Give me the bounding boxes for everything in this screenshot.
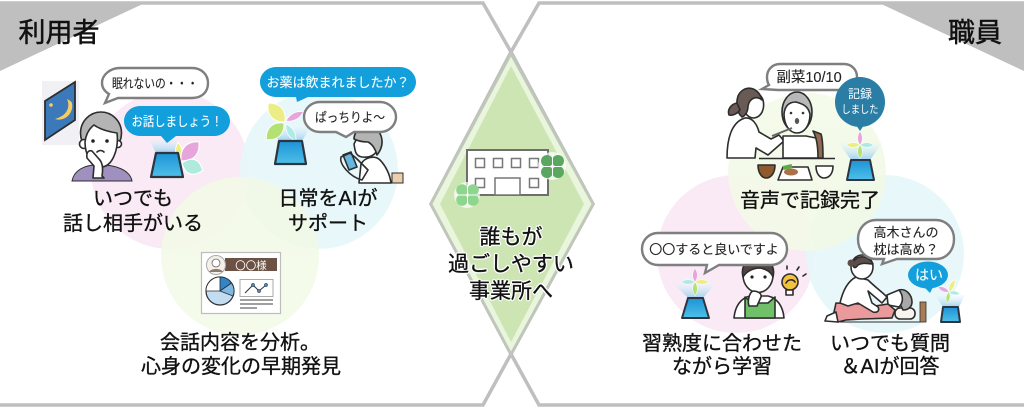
- tablet with beam and flower: talk: [149, 137, 205, 178]
- speech circle: recorded: しました: [842, 103, 878, 116]
- speech bubble: sleepless: [102, 68, 208, 103]
- heading: users: 利用者: [18, 18, 100, 48]
- panel frame: staff: [511, 2, 1024, 405]
- caption: always someone to talk to: 話し相手がいる: [63, 212, 203, 235]
- caption: AI supports daily life: サポート: [288, 212, 368, 235]
- center message: [448, 224, 574, 303]
- tablet with beam and flower: answer: [935, 279, 965, 322]
- caption: always someone to talk to: [63, 188, 203, 235]
- icon: building with clovers: [454, 150, 566, 208]
- speech bubble: feeling good: [304, 102, 396, 137]
- speech bubble: advice: [642, 233, 787, 273]
- center message: 誰もが: [480, 226, 542, 249]
- background circles: staff: [657, 93, 964, 333]
- center message: 過ごしやすい: [448, 253, 574, 276]
- illustration: man drinking: [341, 127, 403, 183]
- illustration: nurse feeding resident: [727, 88, 835, 180]
- center diamond: [431, 54, 593, 354]
- background circles: users: [91, 91, 398, 335]
- caption: learning at own level: [642, 332, 802, 378]
- icon: analysis report: 〇〇様: [235, 259, 267, 272]
- speech bubble: feeling good: ぱっちりよ〜: [315, 110, 385, 125]
- illustration: nurse caring for lying resident: [825, 255, 926, 322]
- speech bubble: medicine: [260, 67, 416, 102]
- speech bubble: side dish record: 副菜10/10: [776, 69, 842, 86]
- speech circle: recorded: 記録: [848, 87, 872, 101]
- caption: analysis: [141, 331, 341, 378]
- speech bubble: sleepless: 眠れないの・・・: [112, 76, 198, 91]
- tablet with beam and flower: learning: [673, 268, 716, 318]
- speech bubble: let's talk: [124, 106, 230, 143]
- illustration: worried woman: [72, 112, 132, 181]
- caption: analysis: 心身の変化の早期発見: [141, 355, 341, 378]
- caption: analysis: 会話内容を分析。: [160, 331, 320, 354]
- icon: light bulb: [782, 266, 806, 295]
- caption: ask anytime and AI answers: いつでも質問: [830, 332, 950, 355]
- speech bubble: pillow question: [858, 220, 954, 264]
- speech bubble: advice: 〇〇すると良いですよ: [649, 242, 779, 257]
- speech bubble: medicine: お薬は飲まれましたか？: [266, 75, 410, 90]
- speech bubble: pillow question: 枕は高め？: [873, 242, 939, 257]
- tablet with beam and flower: daily support: [262, 99, 311, 164]
- caption: AI supports daily life: [279, 187, 377, 235]
- caption: ask anytime and AI answers: ＆AIが回答: [841, 355, 939, 378]
- speech bubble: pillow question: 高木さんの: [873, 225, 939, 240]
- icon: analysis report: [202, 252, 280, 314]
- caption: always someone to talk to: いつでも: [93, 188, 173, 210]
- center message: 事業所へ: [469, 280, 553, 303]
- caption: learning at own level: ながら学習: [672, 355, 772, 378]
- speech circle: recorded: [835, 77, 885, 131]
- heading: staff: 職員: [948, 18, 1002, 48]
- illustration: thinking staff in apron: [734, 258, 784, 318]
- caption: AI supports daily life: 日常をAIが: [279, 187, 377, 210]
- panel frame: users: [0, 2, 511, 405]
- caption: ask anytime and AI answers: [830, 332, 950, 378]
- speech bubble: let's talk: お話しましょう！: [132, 114, 222, 129]
- speech bubble: side dish record: [762, 64, 857, 90]
- caption: voice recording complete: 音声で記録完了: [740, 189, 880, 212]
- speech bubble: yes: はい: [915, 267, 943, 283]
- tablet with beam and flower: recording: [839, 131, 882, 180]
- illustration: night window: [42, 81, 79, 145]
- speech bubble: yes: [908, 262, 948, 293]
- caption: learning at own level: 習熟度に合わせた: [642, 332, 802, 355]
